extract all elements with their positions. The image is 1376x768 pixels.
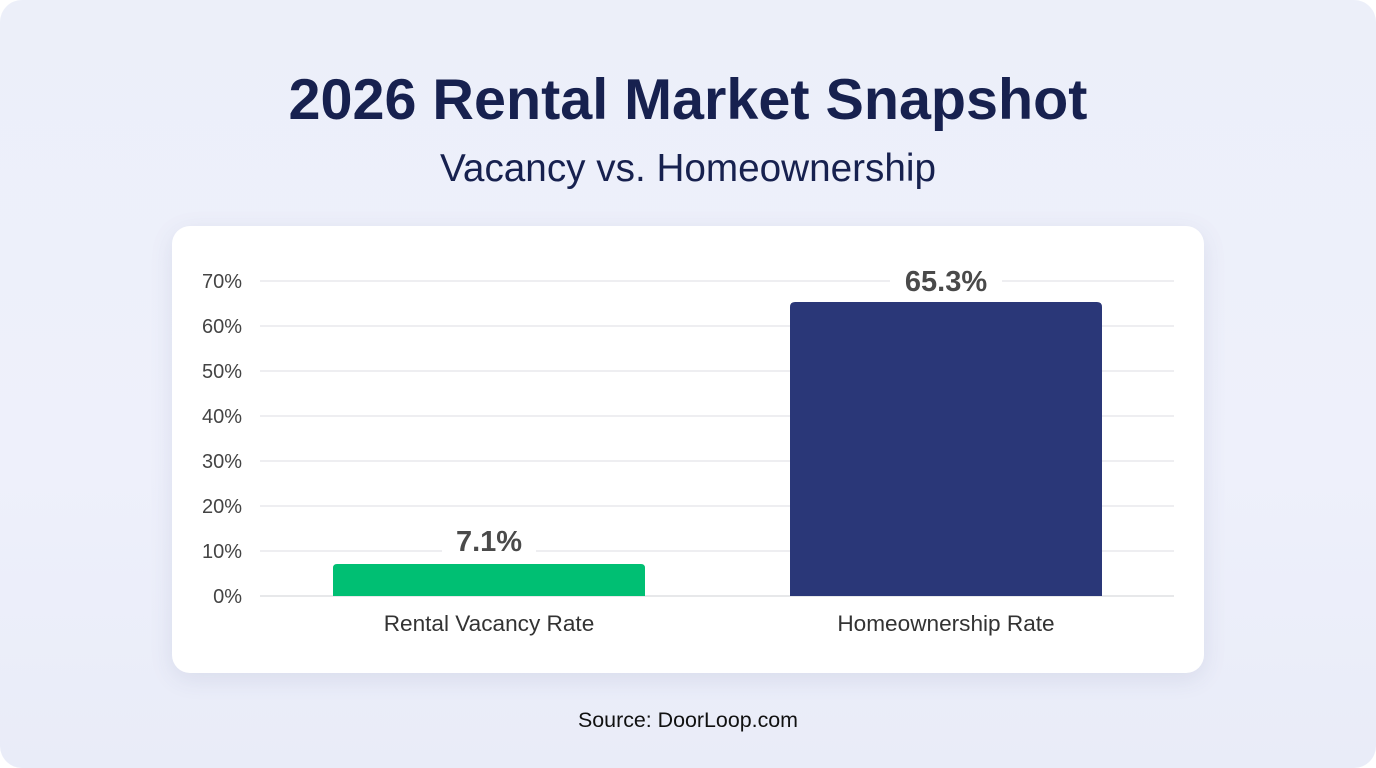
bar chart: 20%: [202, 496, 242, 518]
subtitle: Vacancy vs. Homeownership: [440, 147, 936, 190]
bar: rental vacancy: [333, 564, 645, 596]
title: 2026 Rental Market Snapshot: [289, 68, 1087, 132]
bar chart: 70%: [202, 271, 242, 293]
bar chart: 0%: [213, 586, 242, 608]
panel: chart card: [172, 226, 1204, 673]
value labels: 65.3%: [905, 266, 987, 298]
bar chart: 60%: [202, 316, 242, 338]
bar: homeownership: [790, 302, 1102, 596]
bar chart: 40%: [202, 406, 242, 428]
bar chart: 10%: [202, 541, 242, 563]
source: Source: DoorLoop.com: [578, 708, 798, 732]
bar chart: 50%: [202, 361, 242, 383]
value labels: 7.1%: [456, 526, 522, 558]
value labels: [442, 263, 1002, 558]
category labels: Rental Vacancy Rate: [384, 611, 594, 636]
bar chart: 30%: [202, 451, 242, 473]
category labels: [384, 611, 1055, 636]
category labels: Homeownership Rate: [837, 611, 1055, 636]
